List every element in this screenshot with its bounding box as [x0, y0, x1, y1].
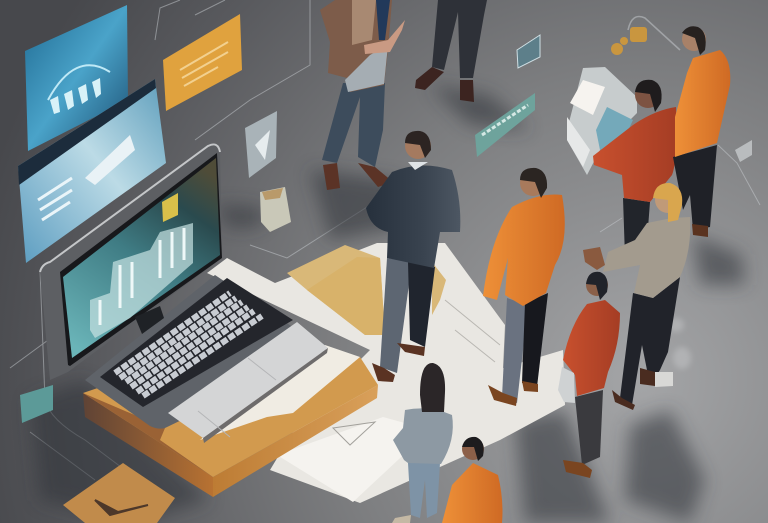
palm rest [168, 322, 328, 438]
gold ornament [611, 27, 647, 55]
small floating note [735, 140, 752, 162]
panel: large blue screen [18, 79, 166, 263]
person: orange right [673, 26, 730, 237]
pale reflections on floor [668, 318, 691, 369]
person: woman in grey [392, 363, 453, 523]
laptop lid outline [40, 144, 222, 380]
notebook on floor [63, 463, 175, 523]
keys [115, 293, 262, 396]
person: small red sweater with bag [558, 272, 620, 478]
person: brown jacket [320, 0, 405, 190]
panel: orange note [163, 14, 242, 111]
box under the laptop [83, 345, 378, 497]
document in hands [567, 67, 637, 175]
tan folder [287, 245, 446, 335]
person: dark suit at top [415, 0, 487, 102]
person: orange bottom [442, 437, 502, 523]
person: red sweater with paper [567, 67, 676, 257]
hand holding card [364, 20, 405, 54]
floating card [245, 111, 277, 178]
laptop base [85, 275, 327, 429]
floating tags [20, 35, 540, 423]
laptop [40, 144, 328, 443]
papers on floor [207, 243, 565, 503]
person: blonde woman [583, 183, 690, 410]
laptop screen [60, 153, 222, 366]
keyboard tray [100, 278, 293, 407]
person: central dark suit [366, 131, 460, 382]
small cylinder [260, 187, 291, 232]
on-screen bar chart [90, 223, 193, 338]
shoulder bag [558, 367, 575, 403]
floor shadows [30, 85, 745, 523]
person: orange sweater [483, 168, 565, 406]
panel: glowing blue chart [25, 5, 128, 151]
